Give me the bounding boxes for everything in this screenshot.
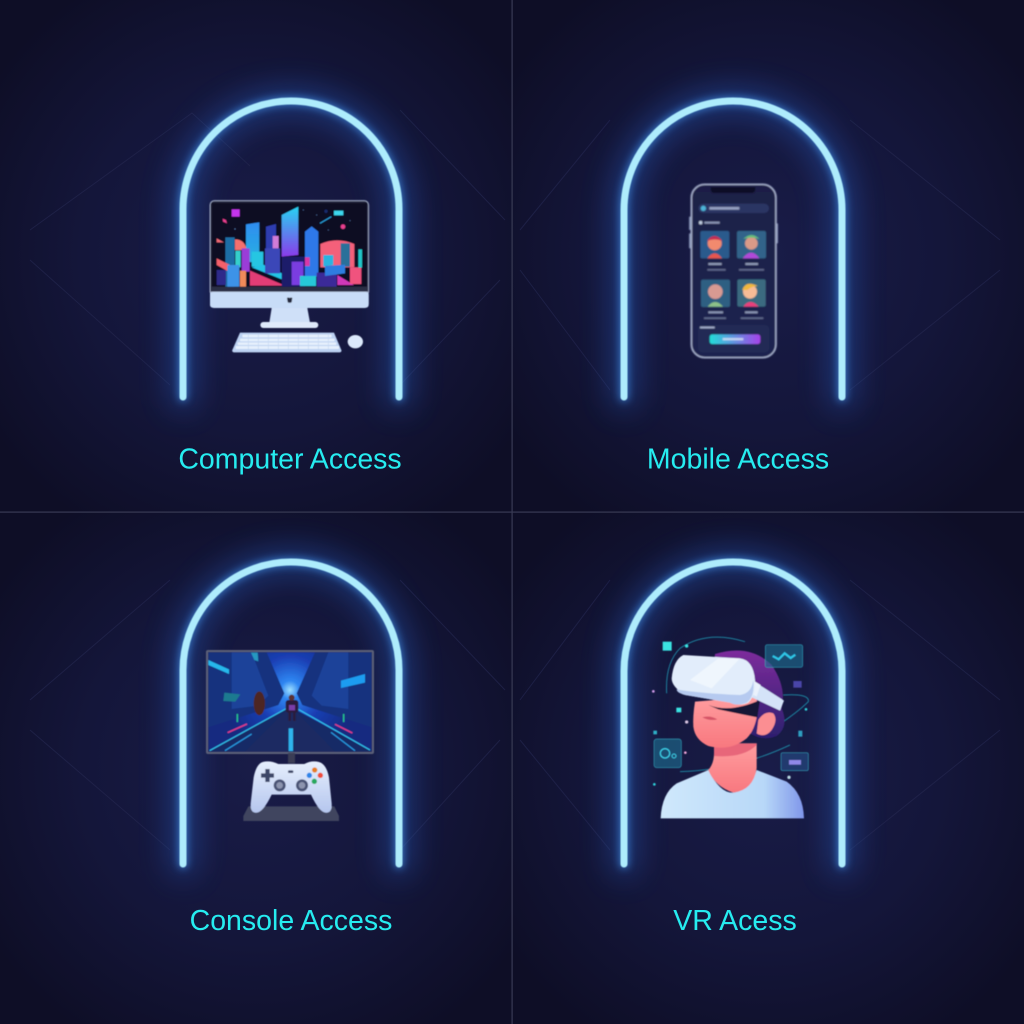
panel: console access [183,562,399,937]
panel: vr access [624,562,842,937]
mouse [348,335,363,348]
illustration: television and game controller [207,651,373,821]
label: console access: Console Access [190,905,392,937]
illustration: person wearing vr headset [652,637,808,818]
label: computer access: Computer Access [178,444,402,476]
particles [652,642,807,786]
search bar [698,204,769,213]
shirt [661,770,804,818]
panel: computer access [178,101,402,476]
panel: mobile access [624,101,842,476]
card captions [704,263,764,319]
game controller [251,761,332,813]
illustration: desktop computer [210,201,369,352]
hair [713,650,785,738]
neon arch: vr [624,562,842,864]
keyboard [232,333,341,352]
neon arch: mobile [624,101,842,397]
monitor [210,201,369,308]
headset [672,655,784,717]
stand [269,308,310,323]
orbit lines [666,637,808,772]
stand [288,753,295,763]
label: vr access: VR Acess [673,905,797,937]
call-to-action panel [698,325,769,352]
avatar cards [700,231,766,307]
neon arch: computer [183,101,399,397]
ear [757,712,775,735]
neon arch: console [183,562,399,864]
logo [287,297,292,303]
floating panels [654,645,808,771]
city artwork [217,207,362,287]
console base [243,806,339,821]
label: mobile access: Mobile Access [647,444,829,476]
television [207,651,373,753]
neck and head [708,743,757,793]
lips [702,717,717,720]
illustration: smartphone [689,184,778,358]
